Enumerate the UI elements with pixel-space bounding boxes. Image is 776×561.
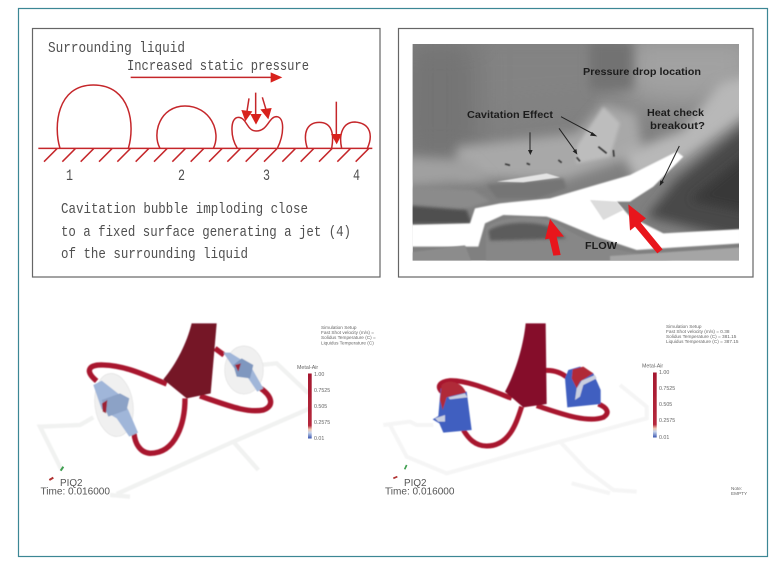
blue casting left bbox=[433, 388, 472, 433]
red core right bbox=[235, 363, 241, 372]
panel: simulation left bbox=[40, 323, 376, 498]
color legend left: 0.505 bbox=[314, 404, 327, 410]
blue hub right bbox=[233, 358, 253, 378]
label: increased static pressure: Increased static pressure bbox=[127, 58, 309, 75]
red runner bbox=[89, 348, 271, 453]
color legend right: Metal-Air bbox=[642, 364, 663, 370]
color legend right: 1.00 bbox=[659, 370, 669, 376]
blue gate left bbox=[93, 381, 138, 437]
surface line with hatching bbox=[38, 148, 372, 162]
heading: surrounding liquid: Surrounding liquid bbox=[48, 40, 185, 57]
label: pressure drop location: Pressure drop location bbox=[583, 67, 701, 78]
label: PIQ2 left: PIQ2 bbox=[60, 477, 83, 489]
stage number 2: 2 bbox=[178, 167, 185, 185]
panel border bbox=[398, 28, 753, 277]
panel border bbox=[32, 28, 380, 277]
color legend right: 0.2575 bbox=[659, 418, 675, 424]
color legend left: Metal-Air bbox=[297, 365, 318, 371]
color legend left: 0.01 bbox=[314, 436, 324, 442]
setup note left: Simulation Setup bbox=[321, 325, 357, 330]
blue casting right bbox=[565, 367, 601, 407]
caption: to a fixed surface generating a jet (4) bbox=[61, 224, 351, 241]
arrow: heat check pointer bbox=[660, 146, 679, 186]
pale edge left bbox=[435, 393, 467, 422]
time stamp right: Time: 0.016000 bbox=[385, 486, 455, 498]
dark sprue funnel bbox=[163, 323, 217, 398]
diagram drawing bbox=[38, 72, 372, 162]
setup note left: Liquidus Temperature (C) bbox=[321, 340, 374, 346]
label: PIQ2 right: PIQ2 bbox=[404, 477, 427, 489]
red wave right bbox=[572, 367, 593, 388]
caption: of the surrounding liquid bbox=[61, 246, 248, 263]
caption: Cavitation bubble imploding close bbox=[61, 201, 308, 218]
note: empty: Note: bbox=[731, 486, 742, 491]
red arrow left bbox=[545, 219, 564, 256]
red arrow right bbox=[628, 204, 663, 253]
time stamp left: Time: 0.016000 bbox=[40, 486, 110, 498]
setup note left bbox=[321, 325, 376, 346]
color legend left bbox=[297, 365, 330, 442]
ghost cavity right bbox=[225, 346, 263, 394]
casting simulation left bbox=[40, 323, 310, 497]
setup note left: Fast Shot velocity (m/s) = bbox=[321, 330, 374, 335]
color legend right bbox=[642, 364, 675, 441]
setup note left: Solidus Temperature (C) = bbox=[321, 335, 376, 340]
dark sprue funnel bbox=[505, 323, 547, 407]
label: heat check breakout: Heat check bbox=[647, 108, 704, 119]
blue hub left bbox=[102, 393, 129, 417]
stage number 3: 3 bbox=[263, 167, 270, 185]
arrows: collapse into bubble 3 bbox=[241, 93, 272, 125]
ghost cavity left bbox=[91, 371, 137, 439]
color legend right: 0.01 bbox=[659, 435, 669, 441]
arrow: pressure direction bbox=[131, 72, 282, 83]
setup note right: Fast Shot velocity (m/s) = 0.38 bbox=[666, 329, 730, 334]
bubble 4 bbox=[305, 122, 370, 148]
red wave left bbox=[440, 382, 466, 410]
bubble 3 bbox=[232, 117, 283, 148]
label: cavitation effect: Cavitation Effect bbox=[467, 109, 554, 121]
label: heat check breakout bbox=[647, 108, 705, 132]
color legend right: 0.505 bbox=[659, 402, 672, 408]
red core left bbox=[102, 400, 107, 413]
label: heat check breakout: breakout? bbox=[650, 121, 705, 132]
color legend left: 1.00 bbox=[314, 372, 324, 378]
panel: simulation right bbox=[383, 323, 748, 498]
faint runner outline bbox=[40, 363, 310, 497]
setup note right: Solidus Temperature (C) = 381.15 bbox=[666, 334, 737, 339]
arrow: cavitation pointer 2 bbox=[559, 128, 577, 155]
axes icon left bbox=[49, 467, 63, 480]
arrow: jet in bubble 4 bbox=[331, 102, 342, 144]
panel: photo of die cavitation bbox=[398, 28, 757, 277]
setup note right: Simulation Setup bbox=[666, 324, 702, 329]
red runner bbox=[439, 370, 607, 446]
casting simulation right bbox=[383, 323, 647, 493]
bubble 1 bbox=[57, 85, 131, 148]
caption bbox=[61, 201, 351, 263]
arrow: cavitation pointer 3 bbox=[561, 117, 597, 136]
stage number 1: 1 bbox=[66, 167, 73, 185]
blue gate right bbox=[223, 353, 263, 392]
color legend right: 0.7525 bbox=[659, 386, 675, 392]
axes icon right bbox=[393, 465, 407, 478]
die surface photo bbox=[412, 44, 739, 261]
setup note right bbox=[666, 324, 739, 344]
color legend left: 0.2575 bbox=[314, 420, 330, 426]
bubble 2 bbox=[157, 106, 216, 148]
label: flow: FLOW bbox=[585, 240, 617, 252]
panel: cavitation bubble diagram bbox=[32, 28, 380, 277]
color legend left: 0.7525 bbox=[314, 388, 330, 394]
stage number 4: 4 bbox=[353, 167, 360, 185]
setup note right: Liquidus Temperature (C) = 387.15 bbox=[666, 339, 739, 344]
faint runner outline bbox=[383, 385, 647, 493]
note: empty bbox=[731, 486, 748, 496]
arrow: cavitation pointer 1 bbox=[528, 132, 533, 155]
note: empty: EMPTY bbox=[731, 491, 748, 496]
pale edge right bbox=[575, 375, 597, 400]
